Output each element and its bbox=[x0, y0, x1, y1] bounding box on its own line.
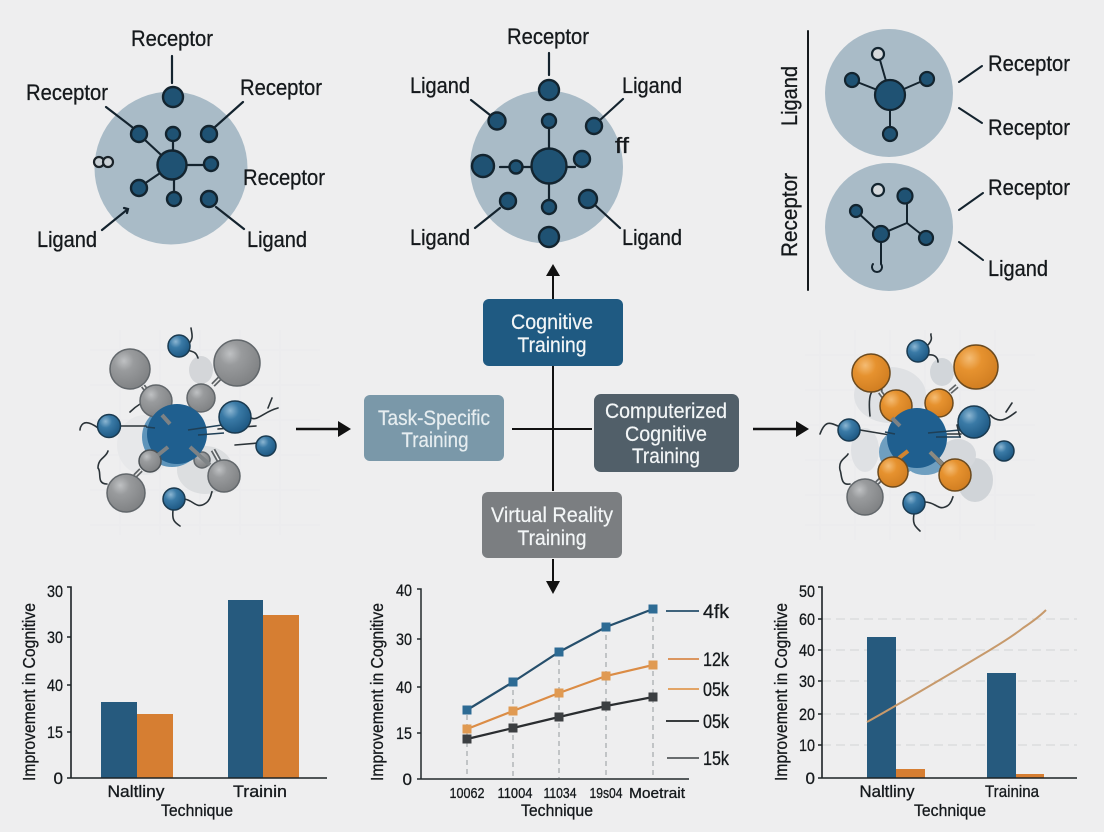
labels bbox=[777, 51, 1070, 281]
axis labels: 0 bbox=[54, 769, 63, 788]
axis labels: 15 bbox=[47, 723, 63, 742]
axis labels: Naltliny bbox=[108, 783, 165, 801]
labels: Receptor bbox=[240, 75, 322, 100]
axis labels: 40 bbox=[799, 641, 815, 660]
panel: receptor diagram left bbox=[26, 26, 325, 252]
axis labels: Trainina bbox=[985, 783, 1040, 801]
box: computerized cognitive training: Cognitive bbox=[625, 422, 707, 446]
labels: Receptor bbox=[988, 175, 1070, 200]
labels: Receptor bbox=[26, 80, 108, 105]
series: orange bbox=[462, 660, 658, 734]
labels: Receptor bbox=[777, 173, 802, 257]
panel: paired receptor diagrams right bbox=[777, 29, 1070, 291]
axis labels: Improvement in Cognitive bbox=[19, 603, 39, 781]
arrow: left molecule to task-specific training bbox=[296, 421, 351, 437]
axis labels: 10 bbox=[799, 736, 815, 755]
labels: Receptor bbox=[131, 26, 213, 51]
connector lines bbox=[471, 53, 623, 228]
combo chart: right bbox=[771, 582, 1077, 820]
box: computerized cognitive training: Training bbox=[632, 444, 700, 468]
axis labels: 0 bbox=[806, 769, 815, 788]
axis labels bbox=[19, 582, 287, 820]
arrow: up bbox=[546, 264, 560, 276]
box: task-specific training: Training bbox=[402, 428, 468, 452]
arrow: computerized training to right molecule bbox=[753, 421, 809, 437]
legend: 05k bbox=[703, 712, 729, 733]
labels: Receptor bbox=[243, 165, 325, 190]
axis labels: 10062 bbox=[450, 785, 484, 802]
trend line bbox=[867, 610, 1046, 722]
axis labels: 40 bbox=[396, 581, 412, 600]
axis labels: 19s04 bbox=[590, 785, 622, 802]
axis labels: Improvement in Cognitive bbox=[367, 603, 387, 781]
molecule nodes bbox=[472, 80, 602, 247]
bars bbox=[867, 637, 1044, 778]
molecule nodes bbox=[131, 87, 218, 207]
axis labels: 0 bbox=[403, 770, 412, 789]
panel: receptor diagram centre bbox=[410, 24, 682, 250]
box: cognitive training: Cognitive bbox=[511, 310, 593, 334]
line chart: centre bbox=[367, 581, 729, 820]
labels bbox=[410, 24, 682, 250]
bars bbox=[101, 600, 299, 778]
box: cognitive training: Training bbox=[518, 333, 586, 357]
box: virtual reality training: Training bbox=[518, 526, 586, 550]
box: virtual reality training: Virtual Reality bbox=[491, 503, 613, 527]
molecule: orange ligands bound to receptor bbox=[805, 330, 1035, 540]
box: computerized cognitive training bbox=[594, 394, 739, 472]
axis labels: 40 bbox=[47, 676, 63, 695]
axis labels: 30 bbox=[799, 672, 815, 691]
axis labels: Technique bbox=[914, 801, 986, 820]
icon: double ring bbox=[94, 157, 113, 167]
box: task-specific training bbox=[364, 395, 504, 461]
labels: Receptor bbox=[988, 51, 1070, 76]
axis labels: Improvement in Cognitive bbox=[771, 603, 791, 781]
axis labels: 11034 bbox=[544, 785, 576, 802]
box: virtual reality training bbox=[482, 492, 622, 558]
axis labels: Technique bbox=[521, 801, 593, 820]
axis labels: 30 bbox=[47, 628, 63, 647]
box: task-specific training: Task-Specific bbox=[378, 406, 490, 430]
labels: Ligand bbox=[410, 225, 470, 250]
labels: Ligand bbox=[777, 66, 802, 126]
arrow: down bbox=[546, 581, 560, 594]
axis labels: Naltliny bbox=[860, 783, 915, 801]
labels: Ligand bbox=[37, 227, 97, 252]
axis labels: Moetrait bbox=[629, 785, 686, 802]
legend: 05k bbox=[703, 680, 729, 701]
axis labels: 30 bbox=[396, 630, 412, 649]
labels: ff bbox=[615, 133, 630, 158]
molecule: grey ligands bound to receptor bbox=[80, 328, 320, 535]
axis labels: 50 bbox=[799, 582, 815, 601]
axis labels: 11004 bbox=[498, 785, 532, 802]
molecule nodes bbox=[845, 48, 934, 245]
axis labels: 20 bbox=[799, 705, 815, 724]
box: computerized cognitive training: Computerized bbox=[605, 399, 727, 423]
bar chart: left bbox=[19, 582, 327, 820]
axis labels bbox=[367, 581, 686, 820]
labels: Receptor bbox=[507, 24, 589, 49]
axis labels: 15 bbox=[396, 724, 412, 743]
series: blue bbox=[462, 604, 658, 714]
axis labels: 40 bbox=[396, 678, 412, 697]
axis labels: Technique bbox=[161, 801, 233, 820]
box: cognitive training bbox=[483, 299, 623, 366]
labels: Ligand bbox=[247, 227, 307, 252]
legend: 4fk bbox=[703, 602, 729, 623]
labels: Ligand bbox=[988, 256, 1048, 281]
connector lines bbox=[852, 60, 983, 272]
axis labels: Trainin bbox=[233, 783, 287, 801]
labels: Ligand bbox=[410, 73, 470, 98]
axis labels: 60 bbox=[799, 610, 815, 629]
legend: 15k bbox=[703, 749, 729, 770]
legend bbox=[666, 602, 729, 770]
axis labels: 30 bbox=[47, 582, 63, 601]
axis labels bbox=[771, 582, 1040, 820]
labels: Ligand bbox=[622, 225, 682, 250]
connector lines bbox=[102, 56, 244, 230]
legend: 12k bbox=[703, 650, 729, 671]
labels bbox=[26, 26, 325, 252]
labels: Ligand bbox=[622, 73, 682, 98]
labels: Receptor bbox=[988, 115, 1070, 140]
flow connectors bbox=[512, 264, 592, 594]
series: black bbox=[462, 692, 658, 744]
